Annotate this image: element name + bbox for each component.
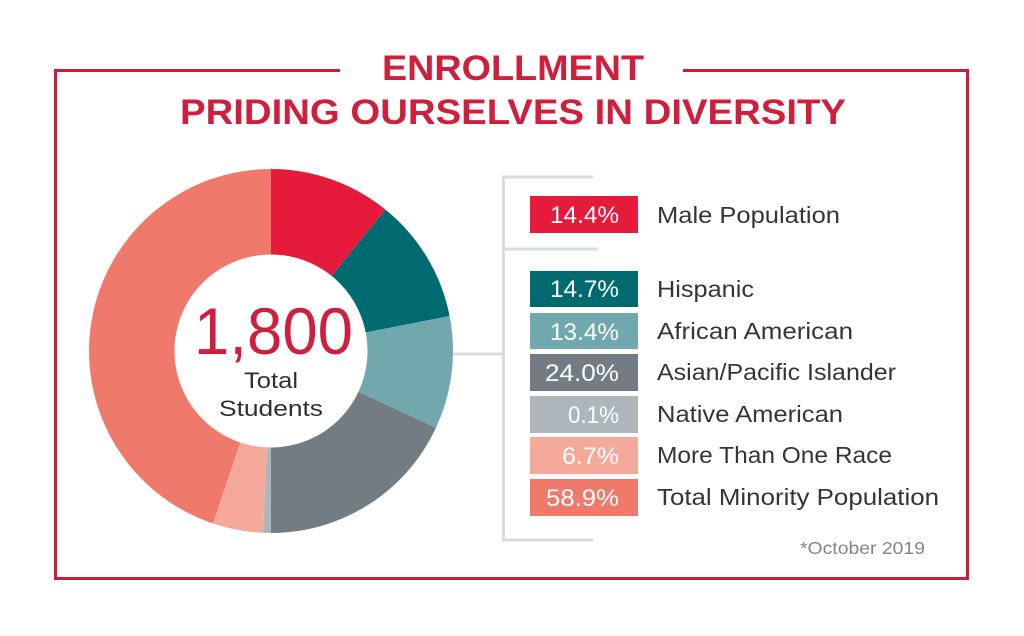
legend row: hispanic: Hispanic [657,276,754,302]
segment: asian/pacific islander [271,351,436,533]
segment: african american [271,316,453,428]
segment: hispanic [271,210,450,351]
segment: more than one race [213,351,271,533]
total label: Total [244,368,298,393]
legend row: hispanic [530,271,754,307]
legend row: total minority: Total Minority Population [657,484,939,510]
legend row: more than one race [530,437,892,474]
legend row: african american [530,313,853,349]
title [180,49,846,132]
total number: 1,800 [194,294,353,368]
title: ENROLLMENT [382,49,644,88]
legend row: more than one race: 6.7% [562,443,619,470]
legend row: asian/pacific islander: 24.0% [545,360,619,387]
segment: total minority [89,169,271,524]
total label: Students [219,396,323,421]
legend row: african american: 13.4% [550,319,619,346]
legend row: asian/pacific islander: Asian/Pacific Islander [657,359,896,385]
legend row: native american [530,396,843,433]
legend row: male [530,196,840,233]
center hole [174,254,368,448]
legend row: native american: 0.1% [568,402,619,429]
date footnote: *October 2019 [800,538,925,558]
legend row: hispanic: 14.7% [550,276,619,303]
legend row: more than one race: More Than One Race [657,442,892,468]
donut chart [89,169,453,533]
legend row: native american: Native American [657,401,843,427]
bracket connector [453,177,598,540]
legend row: male: 14.4% [550,202,619,229]
legend row: male: Male Population [657,202,840,228]
legend row: asian/pacific islander [530,354,896,391]
legend row: total minority: 58.9% [546,485,619,512]
legend row: african american: African American [657,318,853,344]
total label [219,368,323,421]
segment: native american [263,351,271,533]
segment: male [271,169,386,351]
red frame [56,70,968,578]
title: PRIDING OURSELVES IN DIVERSITY [180,93,846,132]
legend row: total minority [530,479,939,516]
